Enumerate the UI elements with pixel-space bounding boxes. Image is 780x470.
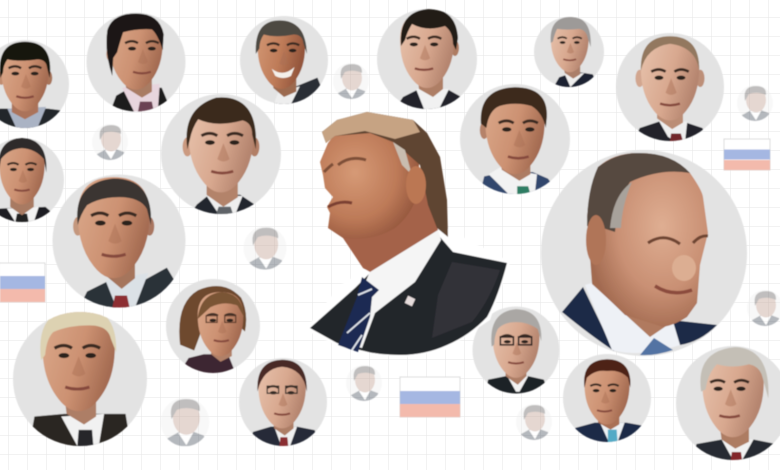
head: [587, 153, 708, 327]
suit: [562, 287, 717, 351]
portrait: older man with white shirt, left: [0, 138, 64, 222]
neck: [592, 263, 672, 337]
tie stripes: [347, 289, 372, 350]
flag: Russia, left: [0, 263, 45, 302]
tie: [640, 338, 673, 355]
eye and brow: [324, 158, 366, 172]
portrait: man with swept brown hair, centre right: [460, 84, 570, 194]
neck: [343, 190, 438, 272]
central portrait: Trump-like figure: [305, 112, 510, 358]
portrait: small faded head top centre: [333, 63, 369, 99]
temple highlight: [610, 182, 632, 228]
hair highlight: [322, 112, 420, 143]
portrait: small faded head bottom: [516, 404, 552, 440]
hair grey streak: [393, 142, 412, 175]
portrait: grey-haired man with glasses: [472, 306, 560, 394]
portrait: man with dark red hair, bottom right: [563, 354, 651, 442]
suit sheen: [432, 262, 500, 338]
portrait: Putin-like large figure, right: [541, 150, 747, 356]
mouth: [328, 202, 352, 207]
portrait: small faded head upper left: [92, 124, 128, 160]
portrait: smiling man with grey-black hair: [240, 16, 328, 104]
flag: Russia, bottom centre: [400, 377, 460, 417]
ear: [406, 166, 426, 204]
lapel pin: [405, 296, 415, 306]
face: [320, 128, 420, 239]
portrait: small faded head lower centre: [346, 365, 382, 401]
flag: Russia, upper right: [724, 139, 770, 170]
portrait: woman with blonde-brown hair and glasses: [166, 279, 260, 373]
nose: [672, 255, 696, 281]
ear: [586, 215, 606, 265]
portrait: small faded head right: [747, 290, 780, 326]
portrait: older white-haired man, bottom right corner: [676, 346, 780, 460]
suit: [310, 232, 507, 355]
portrait: small faded head top right: [737, 85, 773, 121]
portrait: small faded head lower left: [161, 398, 209, 446]
white halo: [305, 225, 510, 358]
portrait: man in dark suit looking left: [377, 9, 477, 109]
portrait: dark-haired man, far left: [0, 40, 69, 128]
eyes and brows: [648, 236, 708, 244]
portrait: older man with blond hair, bottom left: [13, 307, 147, 446]
portrait: man with side-parted hair, centre top: [161, 94, 281, 214]
portrait: bald man with glasses, bottom: [239, 358, 327, 446]
hair: [587, 153, 690, 232]
shirt: [342, 229, 441, 348]
portrait: stern man in dark suit, left: [52, 174, 185, 308]
tie: [338, 277, 379, 352]
shirt: [585, 283, 680, 353]
smile: [655, 286, 692, 293]
portrait: small faded head centre left: [243, 226, 287, 270]
portrait: bald man, upper right: [616, 33, 724, 141]
hair: [322, 112, 448, 237]
portrait: man with swept dark hair: [86, 12, 186, 112]
portrait: grey-haired man, top right: [534, 17, 604, 87]
